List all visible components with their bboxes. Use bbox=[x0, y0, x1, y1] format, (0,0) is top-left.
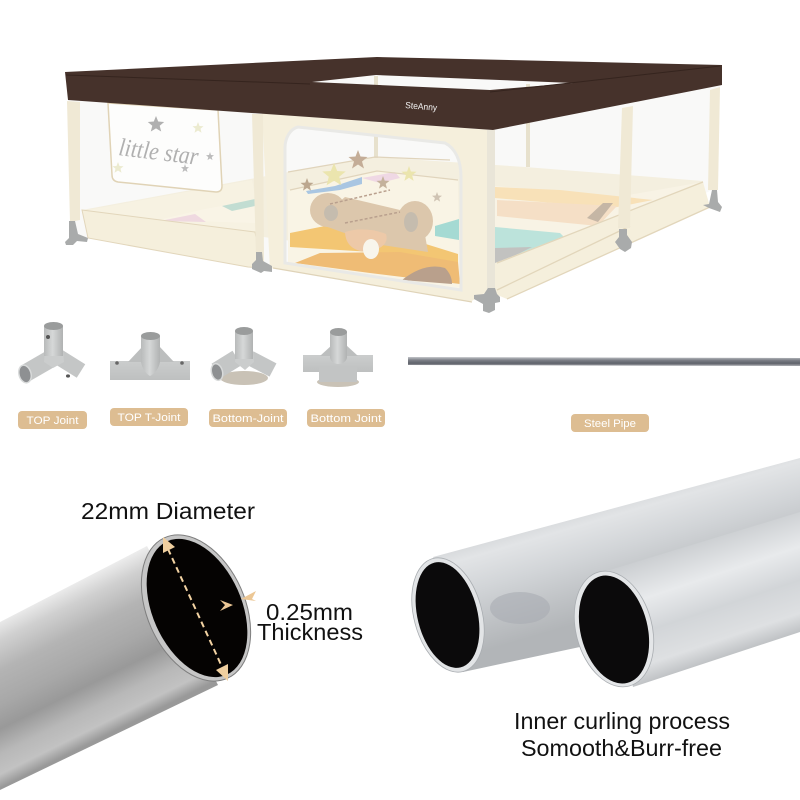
joint: TOP T-Joint bbox=[110, 332, 190, 380]
pill: TOP T-Joint: TOP T-Joint bbox=[118, 412, 180, 424]
diameter arrow bbox=[163, 537, 228, 681]
caption: Inner curling process bbox=[514, 708, 730, 734]
door stars bbox=[300, 150, 442, 202]
back tube bbox=[400, 458, 800, 680]
joint: steel pipe bbox=[408, 357, 800, 366]
plastic feet bbox=[65, 190, 722, 313]
front right beige panel bbox=[495, 182, 710, 299]
hanging flap with little star text bbox=[108, 103, 222, 192]
front door panel bbox=[262, 113, 490, 302]
floor mat: left section bbox=[83, 180, 262, 232]
mesh interior bbox=[68, 70, 720, 295]
heading: 22mm Diameter: 22mm Diameter bbox=[81, 498, 255, 524]
thickness arrows bbox=[220, 591, 256, 611]
label pills bbox=[18, 408, 649, 432]
pill: Bottom-Joint bbox=[209, 409, 287, 427]
heading: 0.25mm Thickness: 0.25mm bbox=[266, 599, 353, 625]
caption bbox=[514, 708, 730, 761]
floor mat: door section bbox=[288, 171, 460, 288]
pill: Steel Pipe: Steel Pipe bbox=[584, 418, 636, 430]
pill: Bottom Joint: Bottom Joint bbox=[310, 413, 382, 425]
brand label: SteAnny bbox=[405, 100, 438, 113]
front tube bbox=[562, 512, 800, 696]
heading: 0.25mm Thickness bbox=[257, 599, 363, 645]
front left beige panel bbox=[82, 210, 262, 268]
pill: TOP T-Joint bbox=[110, 408, 188, 426]
pill: TOP Joint: TOP Joint bbox=[26, 415, 78, 427]
floor mat: right section bbox=[495, 182, 703, 263]
joint: TOP Joint bbox=[17, 322, 81, 384]
right tubes photo bbox=[400, 458, 800, 696]
fabric poles bbox=[67, 87, 720, 290]
pill: Bottom Joint bbox=[307, 409, 385, 427]
heading: 0.25mm Thickness: Thickness bbox=[257, 619, 363, 645]
product photo: playpen bbox=[65, 57, 722, 313]
top band bbox=[65, 57, 722, 130]
caption: Somooth&Burr-free bbox=[521, 735, 722, 761]
pill: TOP Joint bbox=[18, 411, 87, 429]
hanging flap with little star text: little star bbox=[117, 134, 200, 171]
pill: Steel Pipe bbox=[571, 414, 649, 432]
back posts bbox=[376, 76, 528, 167]
left tube photo bbox=[0, 518, 272, 790]
pill: Bottom-Joint: Bottom-Joint bbox=[212, 413, 284, 425]
joint: Bottom-Joint bbox=[209, 327, 273, 385]
joint: Bottom Joint bbox=[303, 328, 373, 387]
back wall fabric bbox=[82, 157, 703, 270]
